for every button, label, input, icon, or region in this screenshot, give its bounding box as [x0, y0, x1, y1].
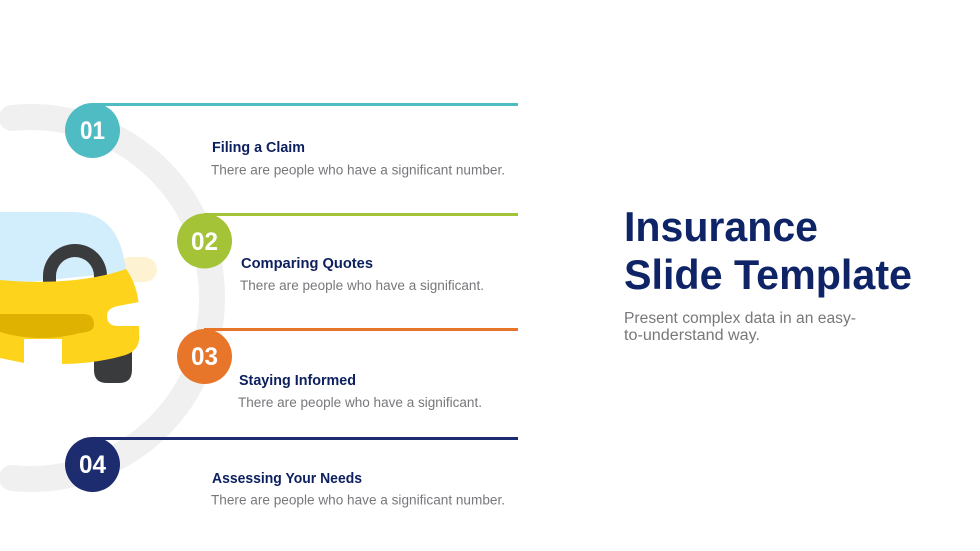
car windshield — [0, 212, 126, 285]
subtitle: Present complex data in an easy- — [624, 310, 856, 327]
title: Insurance — [624, 203, 818, 250]
step 02: 02 — [191, 228, 218, 256]
headlight — [107, 302, 139, 326]
step 01 — [65, 103, 518, 178]
step 04 description: There are people who have a significant number. — [211, 492, 505, 508]
subtitle — [624, 310, 856, 344]
number plate — [24, 339, 62, 365]
step 01 description: There are people who have a significant number. — [211, 162, 505, 178]
step 03 — [177, 328, 518, 410]
title — [624, 203, 912, 298]
car tire — [94, 340, 132, 383]
step 03: 03 — [191, 343, 218, 371]
car mirror — [118, 257, 157, 282]
step 04 heading: Assessing Your Needs — [212, 471, 362, 487]
step 01 heading: Filing a Claim — [212, 140, 305, 156]
subtitle: to-understand way. — [624, 327, 760, 344]
curved road arc — [12, 117, 212, 479]
car grille — [0, 314, 94, 338]
step 04 — [65, 437, 518, 508]
step 04: 04 — [79, 451, 106, 479]
step 03 heading: Staying Informed — [239, 373, 356, 389]
icon: yellow car front — [0, 212, 157, 383]
step 03 description: There are people who have a significant. — [238, 395, 482, 410]
step 02 heading: Comparing Quotes — [241, 256, 373, 272]
step 01: 01 — [80, 117, 105, 145]
step 02 description: There are people who have a significant. — [240, 278, 484, 293]
title: Slide Template — [624, 251, 912, 298]
step 02 — [177, 213, 518, 293]
car body — [0, 269, 139, 364]
steering wheel — [43, 244, 107, 284]
